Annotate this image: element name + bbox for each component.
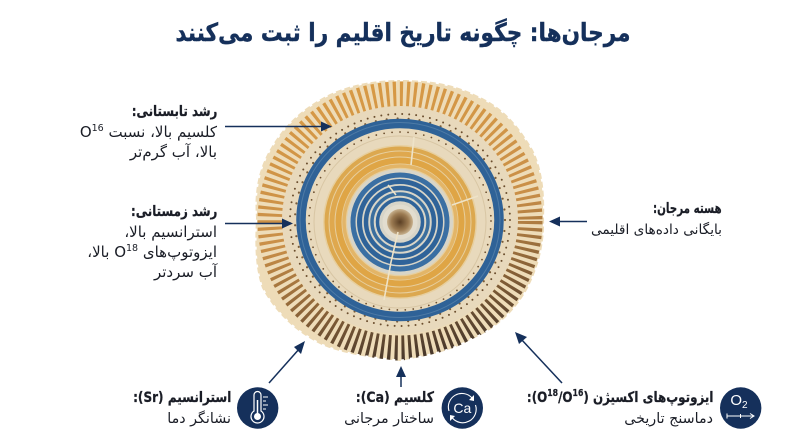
arrow: summer growth [225,122,332,132]
arrow: calcium [396,366,406,387]
text: summer growth [80,104,217,161]
icon: oxygen: O [730,392,742,409]
text: calcium: ساختار مرجانی [344,411,434,427]
icon: calcium: Ca [453,400,471,416]
arrow: oxygen isotopes [515,332,562,383]
text: winter growth: رشد زمستانی: [131,204,217,220]
text: winter growth: استرانسیم بالا، [124,223,217,241]
text: strontium: نشانگر دما [167,411,231,427]
text: oxygen isotopes: ایزوتوپ‌های اکسیژن (O18/O16): [527,388,713,406]
text: coral core: بایگانی داده‌های اقلیمی [591,222,722,238]
title: مرجان‌ها: چگونه تاریخ اقلیم را ثبت می‌کنند [175,18,630,47]
text: strontium [133,390,231,427]
icon: oxygen: 2 [742,400,748,411]
icon: oxygen [720,387,761,429]
icon: calcium [442,387,483,429]
text: coral core: هسته مرجان: [653,201,722,217]
text: winter growth: ایزوتوپ‌های O18 بالا، [87,243,217,261]
text: summer growth: کلسیم بالا، نسبت O16 [80,123,217,141]
text: calcium: کلسیم (Ca): [356,390,434,406]
text: summer growth: رشد تابستانی: [131,104,217,120]
text: oxygen isotopes: دماسنج تاریخی [624,411,713,427]
arrow: winter growth [225,218,293,228]
text: summer growth: بالا، آب گرم‌تر [130,143,217,161]
text: calcium [344,390,434,427]
coral cross-section [255,80,544,361]
arrow: coral core [549,216,587,226]
text: oxygen isotopes [527,388,713,427]
icon: thermometer [237,387,278,429]
text: winter growth [87,204,218,281]
text: coral core [591,201,722,238]
text: winter growth: آب سردتر [154,263,217,281]
arrow: strontium [269,341,305,383]
text: strontium: استرانسیم (Sr): [133,390,231,406]
